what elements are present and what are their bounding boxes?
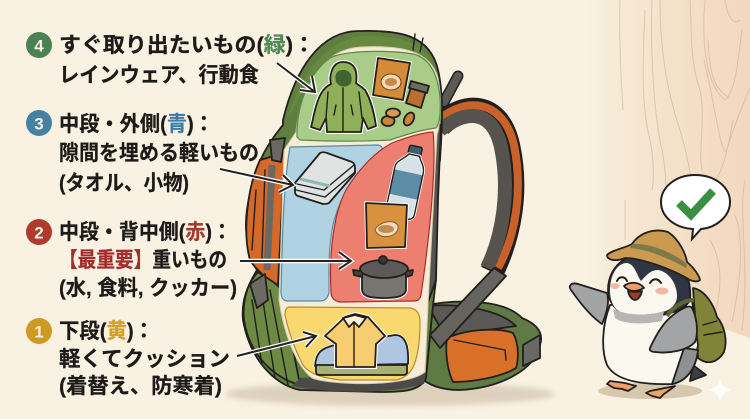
tail [690,365,706,381]
compartment: red (middle back) [331,132,434,302]
neck collar [613,309,664,323]
text 3a: 隙間を埋める軽いもの [59,142,259,165]
text 1a: 軽くてクッション [59,348,230,371]
heading 4: すぐ取り出たいもの( 緑)： [59,34,315,57]
badge 2: 2 [34,224,44,242]
right back panel [417,125,441,370]
item: shirt [325,314,385,367]
badge 1: 1 [34,322,44,342]
item: food pouch 2 [366,203,407,248]
body side [672,348,698,384]
speech bubble with check mark [661,175,730,239]
hip belt [420,302,541,390]
badge 3: 3 [34,114,44,134]
text 2a: 【最重要】重いもの [59,249,227,272]
text 2b: (水, 食料, クッカー) [59,277,237,300]
compartment: blue (middle outer) [281,145,382,301]
right wing [650,307,697,353]
top compression strap [444,76,458,102]
item: rain jacket [311,62,376,132]
label 2: red [26,219,237,300]
badge 1 [26,318,52,344]
shoulder strap [440,105,518,272]
beak [624,283,644,291]
arrow: to towel [220,169,293,192]
item: cooking pot [353,256,413,298]
label 1: yellow [26,318,230,398]
compartment: green (top) [297,51,440,141]
arrow: to shirt [237,332,316,356]
icon: check mark [679,191,713,215]
text 3b: (タオル、小物) [59,172,189,195]
item: snacks [382,108,416,127]
hat [607,230,700,282]
main body [243,31,442,392]
face [610,263,677,315]
label 4: green [26,32,315,87]
left orange side pocket [246,138,285,285]
sparkle [709,378,731,402]
arrow: to jacket [277,63,315,92]
item: jar [406,81,429,108]
badge 2 [26,219,52,245]
item: folded clothes [315,335,408,375]
side tension strap [430,268,506,348]
pack strap [667,300,694,316]
heading 2: 中段・背中側(赤)： [59,221,232,244]
top lid highlights [288,36,436,118]
item: food pouch [373,58,410,100]
lower left green pocket [244,272,426,392]
badge 4: 4 [34,36,44,56]
ground shadow [598,383,702,399]
heading 1: 下段(黄)： [59,320,154,343]
wooden wall [570,0,750,338]
head [608,251,690,317]
item: folded towel [295,152,355,204]
penguin mascot [570,230,726,399]
left wing [570,283,608,324]
item: water bottle [385,143,428,220]
badge 4 [26,32,52,58]
cream inner panel [279,47,441,384]
heading 3: 中段・外側(青)： [59,113,214,136]
arrow: to pot [240,252,351,269]
feet [607,381,636,391]
eyes [617,277,661,283]
body [603,300,698,384]
mouth [628,291,642,300]
backpack on penguin [693,288,726,362]
backpack [243,31,541,392]
label 3: blue [26,110,259,195]
text 4: レインウェア、行動食 [59,64,259,87]
cheeks [610,283,620,289]
text 1b: (着替え、防寒着) [59,375,222,398]
floor shadow [225,382,555,406]
compartment: yellow (bottom) [285,307,420,380]
badge 3 [26,110,52,136]
hip pocket [446,330,518,382]
